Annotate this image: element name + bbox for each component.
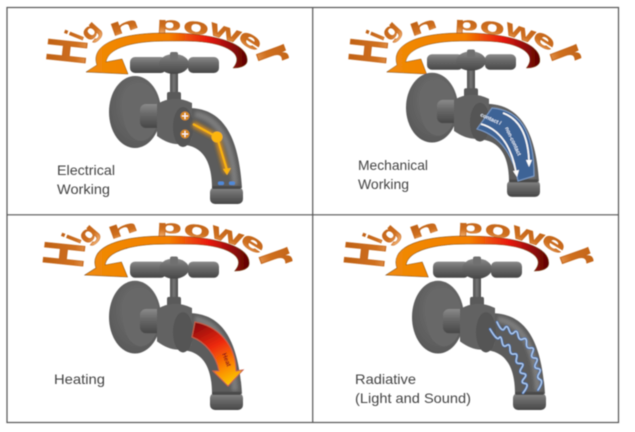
high power lettering: p <box>457 216 483 238</box>
high power lettering: w <box>508 218 548 252</box>
high power lettering: r <box>538 35 598 72</box>
high power lettering: e <box>529 22 561 56</box>
turning arrow <box>386 236 549 277</box>
high power lettering <box>34 12 307 72</box>
high power lettering: H <box>332 239 399 270</box>
faucet <box>406 49 540 197</box>
high power lettering: p <box>156 216 182 238</box>
high power lettering: g <box>74 15 106 46</box>
panel: mechanical working <box>337 11 598 197</box>
high power lettering: e <box>236 226 270 260</box>
high power lettering: g <box>373 218 405 249</box>
high power lettering <box>337 11 598 72</box>
high power lettering <box>31 215 312 275</box>
high power lettering: w <box>501 14 539 49</box>
high power lettering: H <box>31 239 98 270</box>
high power lettering: o <box>483 215 513 244</box>
high power lettering: r <box>244 35 307 72</box>
label: heating: Heating <box>54 371 105 387</box>
high power lettering: w <box>207 218 247 252</box>
label: radiative: (Light and Sound) <box>355 390 471 406</box>
high power lettering: i <box>61 27 90 44</box>
label: mechanical working: Working <box>358 176 409 192</box>
high power lettering: r <box>548 238 613 275</box>
label: mechanical working: Mechanical <box>358 157 428 173</box>
faucet <box>109 52 243 204</box>
spout caption: contact / <box>479 112 502 127</box>
panel: radiative <box>332 215 613 410</box>
high power lettering: h <box>105 215 140 243</box>
high power lettering: p <box>454 14 479 35</box>
high power lettering: h <box>407 13 440 40</box>
high power lettering <box>332 215 613 275</box>
label: electrical working: Working <box>57 181 110 197</box>
turning arrow <box>387 33 540 74</box>
high power lettering: e <box>234 23 267 57</box>
high power lettering: i <box>362 27 391 44</box>
faucet <box>412 257 546 410</box>
high power lettering: g <box>376 16 406 46</box>
high power lettering: g <box>72 218 104 249</box>
heat word: Heat <box>220 352 232 369</box>
panel: heating <box>31 215 312 410</box>
high power lettering: w <box>206 13 245 49</box>
high power lettering: H <box>337 36 400 67</box>
high power lettering: e <box>537 226 571 260</box>
heat arrow on spout <box>192 322 243 386</box>
high power lettering: o <box>478 11 507 41</box>
turning arrow <box>85 236 249 277</box>
contact arrows on spout <box>477 108 534 181</box>
label: radiative: Radiative <box>355 371 416 387</box>
panel: electrical working <box>34 12 307 204</box>
high power lettering: H <box>34 36 99 67</box>
electric charge flow on spout <box>180 112 235 185</box>
high power lettering: i <box>57 230 88 247</box>
high power lettering: h <box>406 215 441 243</box>
label: electrical working: Electrical <box>57 162 115 178</box>
high power lettering: i <box>358 230 389 247</box>
high power lettering: h <box>107 12 141 40</box>
high power lettering: o <box>182 12 211 41</box>
high power lettering: o <box>182 215 212 244</box>
turning arrow <box>86 33 247 74</box>
high power lettering: r <box>247 238 312 275</box>
faucet <box>109 257 243 410</box>
contact arrows on spout: non-contact <box>503 126 522 157</box>
high power lettering: p <box>156 13 182 35</box>
radiation waves on spout <box>490 322 542 393</box>
